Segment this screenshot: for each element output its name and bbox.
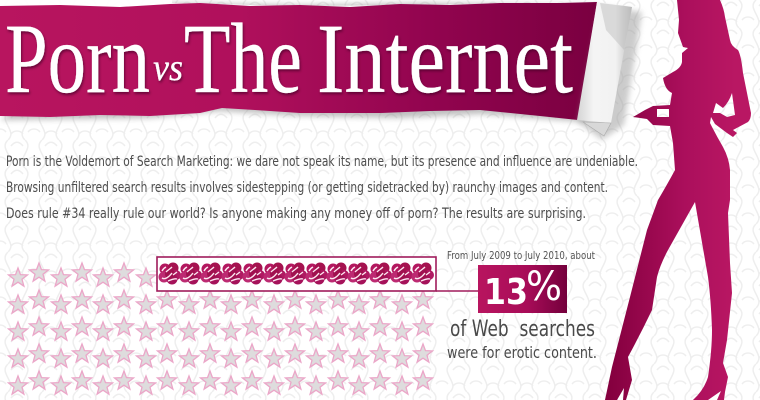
title text: The xyxy=(184,3,302,114)
connector line xyxy=(436,290,479,292)
title text xyxy=(5,3,573,114)
intro paragraph: Does rule #34 really rule our world? Is anyone making any money off of porn? The results are surprising. xyxy=(6,206,586,222)
intro paragraph xyxy=(6,154,638,222)
statistic lead-in: From July 2009 to July 2010, about xyxy=(447,249,596,262)
statistic caption: of Web searches xyxy=(450,317,595,342)
statistic caption: were for erotic content. xyxy=(447,343,597,362)
statistic caption xyxy=(447,317,597,362)
statistic box: 13% xyxy=(478,264,567,313)
title text: Porn xyxy=(5,3,150,114)
title text: Internet xyxy=(317,3,573,114)
silhouette of a woman xyxy=(605,0,751,400)
statistic box: 13%: 13 xyxy=(484,272,528,313)
title text: vs xyxy=(153,47,183,89)
statistic box: 13%: % xyxy=(526,264,562,310)
torn ribbon xyxy=(0,2,597,120)
title banner xyxy=(0,0,597,122)
page curl xyxy=(577,2,642,140)
highlighted box of flowers xyxy=(157,257,436,291)
star grid xyxy=(8,263,433,394)
